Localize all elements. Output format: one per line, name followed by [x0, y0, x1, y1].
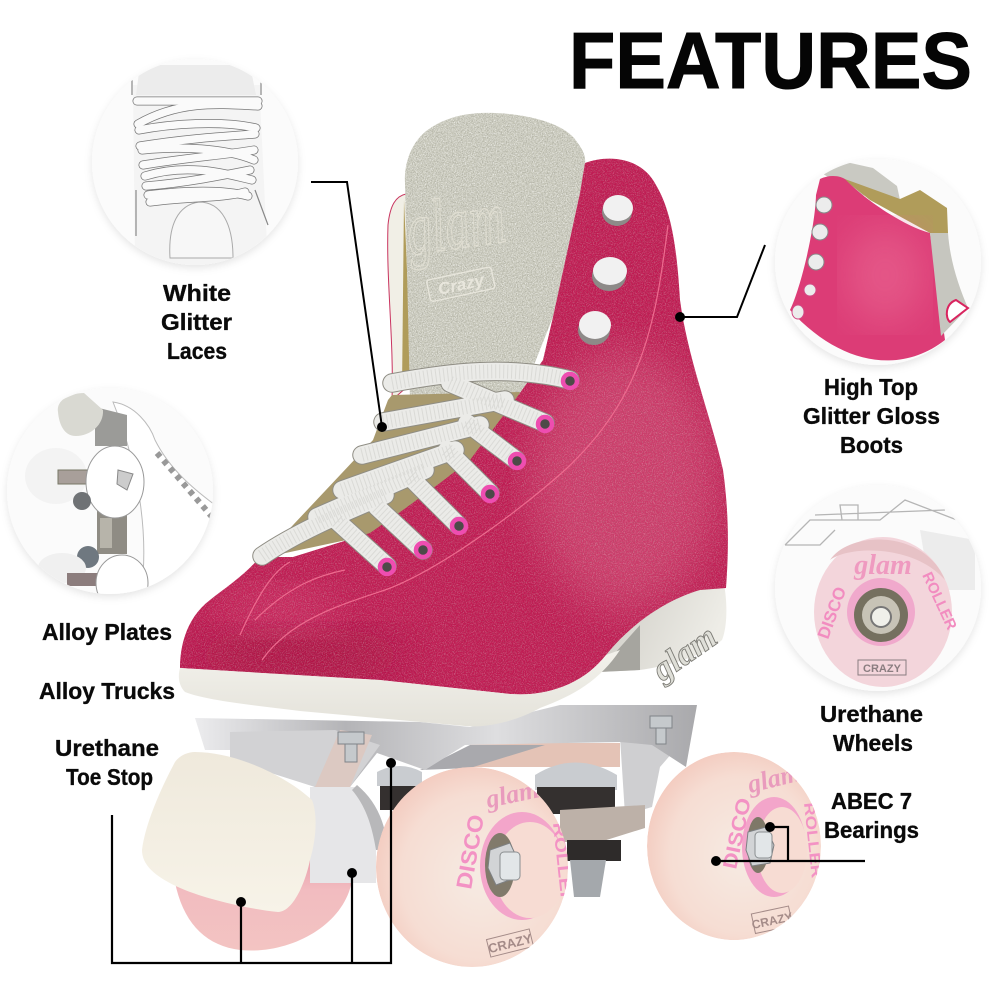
skate: front left wheel: ROLLER [549, 821, 577, 907]
boot: heel block [598, 584, 726, 672]
skate: front left wheel: CRAZY [487, 931, 534, 956]
label: urethane toe stop: Toe Stop [66, 764, 153, 790]
inset: urethane wheels: ROLLER [918, 570, 960, 633]
label: abec 7 bearings [824, 788, 919, 843]
leader: boots [675, 245, 765, 322]
boot: pink glitter body [170, 150, 740, 700]
skate: urethane toe stop [142, 752, 316, 912]
skate: front right wheel: glam [743, 758, 803, 799]
label: urethane toe stop: Urethane [55, 735, 159, 761]
label: white glitter laces [161, 280, 232, 364]
label: high top glitter gloss boots: Glitter Gloss [803, 403, 940, 429]
inset silver counter [930, 233, 968, 336]
label: urethane wheels [820, 701, 923, 756]
skate: front left wheel [376, 767, 577, 967]
boot: inner liner [388, 194, 415, 400]
leader: wheels and bearings [711, 822, 865, 866]
leader: toe stop, trucks and plates [112, 758, 396, 963]
skate: front right wheel: CRAZY [751, 910, 794, 932]
boot: silver glitter tongue: Crazy [436, 270, 487, 299]
skate: front right wheel: ROLLER [800, 802, 825, 879]
label: white glitter laces: White [163, 280, 231, 306]
boot: white sole [179, 650, 620, 726]
label: high top glitter gloss boots [803, 374, 940, 458]
inset: urethane wheels: DISCO [814, 584, 850, 641]
label: urethane wheels: Urethane [820, 701, 923, 727]
label: abec 7 bearings: ABEC 7 [831, 788, 912, 814]
label: abec 7 bearings: Bearings [824, 817, 919, 843]
inset: urethane wheels: CRAZY [863, 663, 902, 675]
skate: middle truck and cushions [377, 737, 686, 897]
nuts on the plate [338, 716, 672, 762]
inset: alloy plates [7, 388, 215, 611]
label: alloy plates: Alloy Plates [42, 619, 172, 645]
boot: olive lining behind the laces [262, 392, 520, 558]
skate: rear left wheel [172, 830, 352, 951]
label: white glitter laces: Laces [167, 338, 227, 364]
inset: high top glitter gloss boots [775, 159, 981, 365]
boot: silver glitter tongue [404, 112, 586, 395]
skate: front right wheel [647, 752, 825, 940]
skate: front left wheel: DISCO [451, 813, 489, 891]
boot: heel logo: glam [645, 618, 724, 689]
leader: laces [311, 182, 387, 432]
label: urethane wheels: Wheels [833, 730, 913, 756]
inset pink shaft [790, 176, 945, 360]
title: FEATURES [569, 16, 972, 105]
inset: urethane wheels [775, 485, 981, 691]
inset: white glitter laces [92, 59, 298, 265]
skate: alloy plate [195, 705, 697, 883]
boot: white glitter laces [262, 371, 570, 566]
label: urethane toe stop [55, 735, 159, 790]
label: white glitter laces: Glitter [161, 309, 232, 335]
label: high top glitter gloss boots: Boots [840, 432, 903, 458]
boot: pink eyelets [380, 374, 577, 574]
label: high top glitter gloss boots: High Top [824, 374, 918, 400]
inset gold lining [842, 178, 948, 233]
inset: urethane wheels: glam [853, 550, 912, 581]
skate: front left wheel: glam [482, 774, 542, 814]
inset silver tongue [824, 163, 900, 199]
label: alloy trucks: Alloy Trucks [39, 678, 175, 704]
boot: white hooks [578, 195, 633, 345]
boot: silver glitter tongue: glam [401, 174, 510, 271]
skate: front right wheel: DISCO [719, 796, 756, 871]
